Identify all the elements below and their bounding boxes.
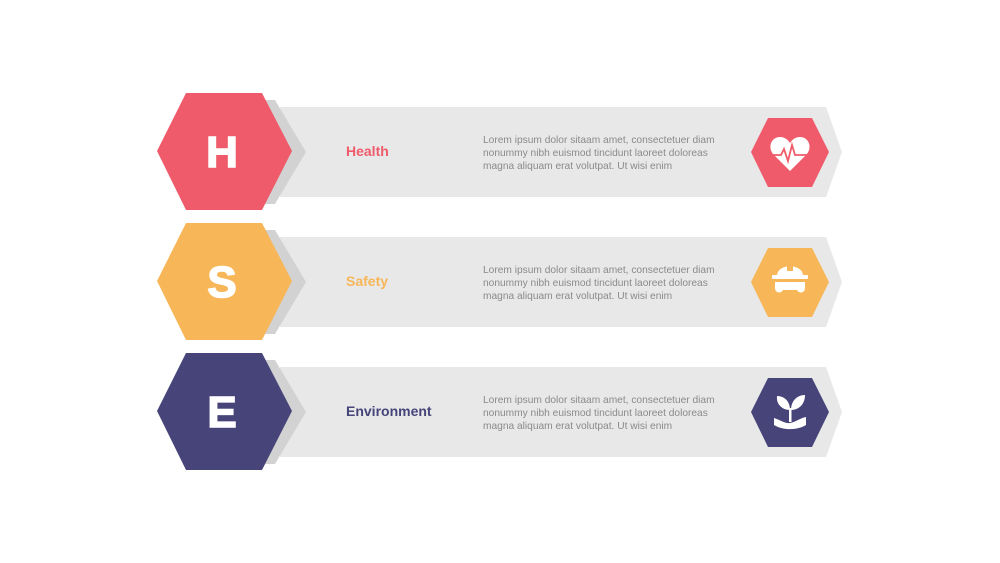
bar: environment (280, 367, 842, 457)
body text: Lorem ipsum dolor sitaam amet, consectetuer diam (483, 395, 715, 406)
row: safety (157, 223, 842, 340)
body text: nonummy nibh euismod tincidunt laoreet doloreas (483, 278, 708, 289)
letter E: E (207, 388, 237, 437)
shadow hexagon (170, 230, 306, 334)
bar: safety (280, 237, 842, 327)
body text: nonummy nibh euismod tincidunt laoreet doloreas (483, 408, 708, 419)
shadow hexagon (170, 360, 306, 464)
body text: Lorem ipsum dolor sitaam amet, consectetuer diam (483, 265, 715, 276)
hexagon: S (157, 223, 292, 340)
letter S: S (207, 258, 237, 307)
body text: Lorem ipsum dolor sitaam amet, consectetuer diam (483, 135, 715, 146)
body text: magna aliquam erat volutpat. Ut wisi enim (483, 421, 672, 432)
letter H: H (206, 128, 238, 177)
shadow hexagon (170, 100, 306, 204)
row: health (157, 93, 842, 210)
hexagon: H (157, 93, 292, 210)
body text: nonummy nibh euismod tincidunt laoreet doloreas (483, 148, 708, 159)
title: Safety: Safety (346, 273, 388, 289)
body text: magna aliquam erat volutpat. Ut wisi enim (483, 161, 672, 172)
icon hexagon: helmet (751, 248, 829, 317)
body text: magna aliquam erat volutpat. Ut wisi enim (483, 291, 672, 302)
icon hexagon: plant (751, 378, 829, 447)
bar: health (280, 107, 842, 197)
icon hexagon: heart (751, 118, 829, 187)
hexagon: E (157, 353, 292, 470)
title: Health: Health (346, 143, 389, 159)
title: Environment: Environment (346, 403, 432, 419)
row: environment (157, 353, 842, 470)
